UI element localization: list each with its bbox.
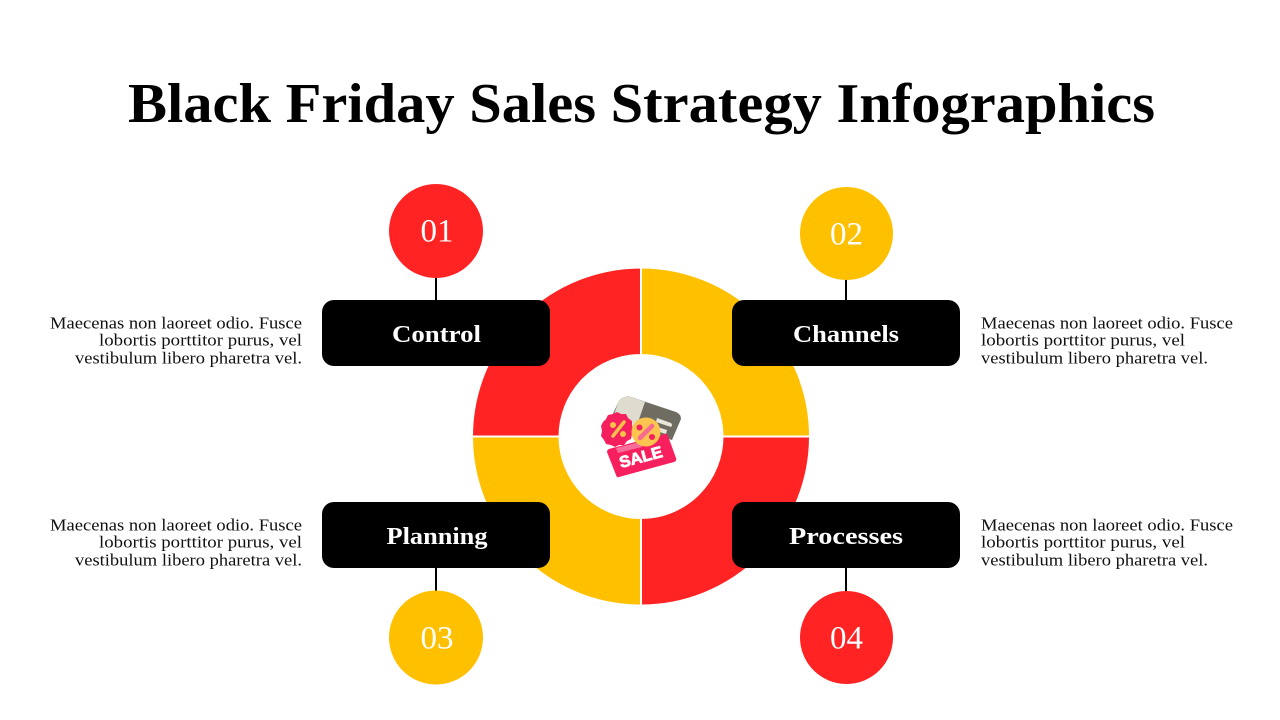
text block: channels description: Maecenas non laoreet odio. Fusce [981,314,1233,332]
step 04: processes: 04 [830,620,863,656]
text block: planning description: vestibulum libero pharetra vel. [75,550,302,570]
text block: planning description [50,516,302,570]
step 02: channels: 02 [830,216,863,252]
step 02: channels [732,187,960,366]
step 03: planning: Planning [386,524,488,550]
step 01: control: 01 [420,214,454,250]
text block: planning description: lobortis porttitor purus, vel [99,532,302,552]
title: Black Friday Sales Strategy Infographics [128,73,1155,135]
text block: control description [50,314,302,368]
step 01: control: Control [392,322,481,348]
step 04: processes [732,502,960,684]
text block: processes description: Maecenas non laoreet odio. Fusce [981,516,1233,534]
step 03: planning: 03 [420,620,454,656]
step 04: processes: Processes [789,524,903,550]
text block: processes description: lobortis porttitor purus, vel [981,532,1185,552]
icon: sale tags: SALE [618,444,665,472]
step 02: channels: Channels [793,322,899,348]
text block: control description: vestibulum libero pharetra vel. [75,348,302,368]
step 03: planning [322,502,550,684]
step 01: control [322,184,550,366]
text block: channels description: vestibulum libero pharetra vel. [981,348,1208,368]
text block: channels description: lobortis porttitor purus, vel [981,330,1185,350]
text block: control description: lobortis porttitor purus, vel [99,330,302,350]
icon: sale tags [601,396,681,477]
donut chart [472,268,810,606]
text block: processes description: vestibulum libero pharetra vel. [981,550,1208,570]
text block: channels description [981,314,1233,368]
text block: planning description: Maecenas non laoreet odio. Fusce [50,516,302,534]
text block: processes description [981,516,1233,570]
text block: control description: Maecenas non laoreet odio. Fusce [50,314,302,332]
